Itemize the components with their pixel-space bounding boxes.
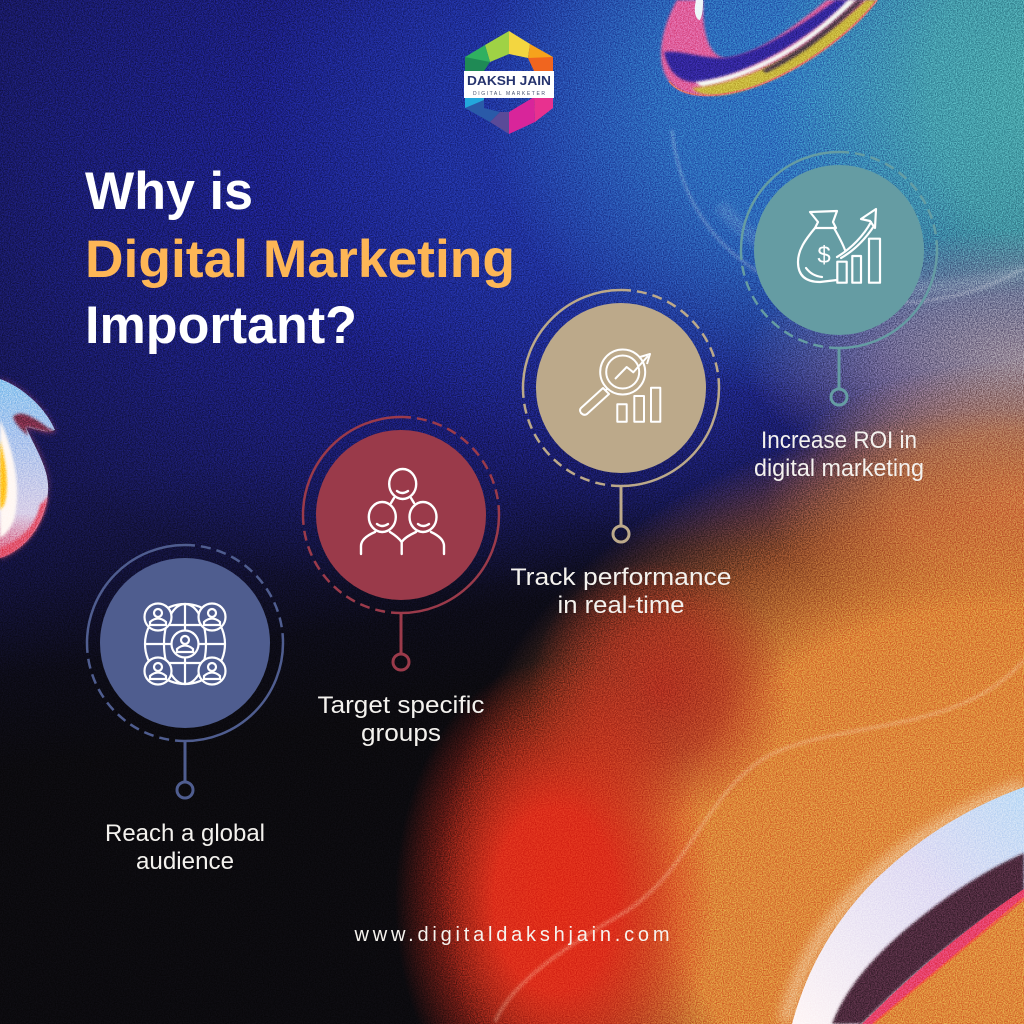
step 3: track performance in real-time [510,290,732,619]
disc 1 [100,558,270,728]
label 1: Reach a global [105,820,265,847]
website url: www.digitaldakshjain.com [354,924,670,946]
label 4 [754,427,924,482]
label 3 [510,564,732,619]
label 2: groups [361,720,441,747]
icon: magnifier and chart [580,350,660,422]
logo name: DAKSH JAIN [467,73,551,88]
stem 4 [831,348,847,405]
ring 2 [303,417,499,613]
title [85,162,515,355]
decorative ring top right [661,0,877,96]
title line 3: Important? [85,296,357,355]
icon: money bag and growth [798,209,880,283]
stem 1 [177,741,193,798]
ring 1 [87,545,283,741]
logo white band [464,71,554,98]
icon: globe with people [144,604,226,684]
label 1: audience [136,848,234,875]
step 2: target specific groups [303,417,499,747]
title line 2: Digital Marketing [85,230,515,289]
stem 2 [393,613,409,670]
icon dollar sign: $ [817,242,831,269]
label 1 [105,820,265,875]
disc 2 [316,430,486,600]
stem 3 [613,486,629,542]
ring 4 [741,152,937,348]
title line 1: Why is [85,162,253,221]
disc 3 [536,303,706,473]
label 3: in real-time [558,592,684,619]
logo [464,31,554,134]
label 3: Track performance [510,564,732,591]
label 2: Target specific [318,692,484,719]
logo tagline: DIGITAL MARKETER [473,91,545,97]
ring 3 [523,290,719,486]
label 4: Increase ROI in [761,427,917,454]
label 4: digital marketing [754,455,924,482]
label 2 [318,692,484,747]
icon: three people [361,469,444,554]
decorative shape left [0,378,56,560]
step 4: increase ROI [741,152,937,482]
decorative ring bottom right [785,785,1024,1024]
glass bubble [672,0,1024,303]
step 1: reach a global audience [87,545,283,875]
wave highlight [495,660,1024,1022]
disc 4 [754,165,924,335]
logo hexagon facets [465,31,553,134]
